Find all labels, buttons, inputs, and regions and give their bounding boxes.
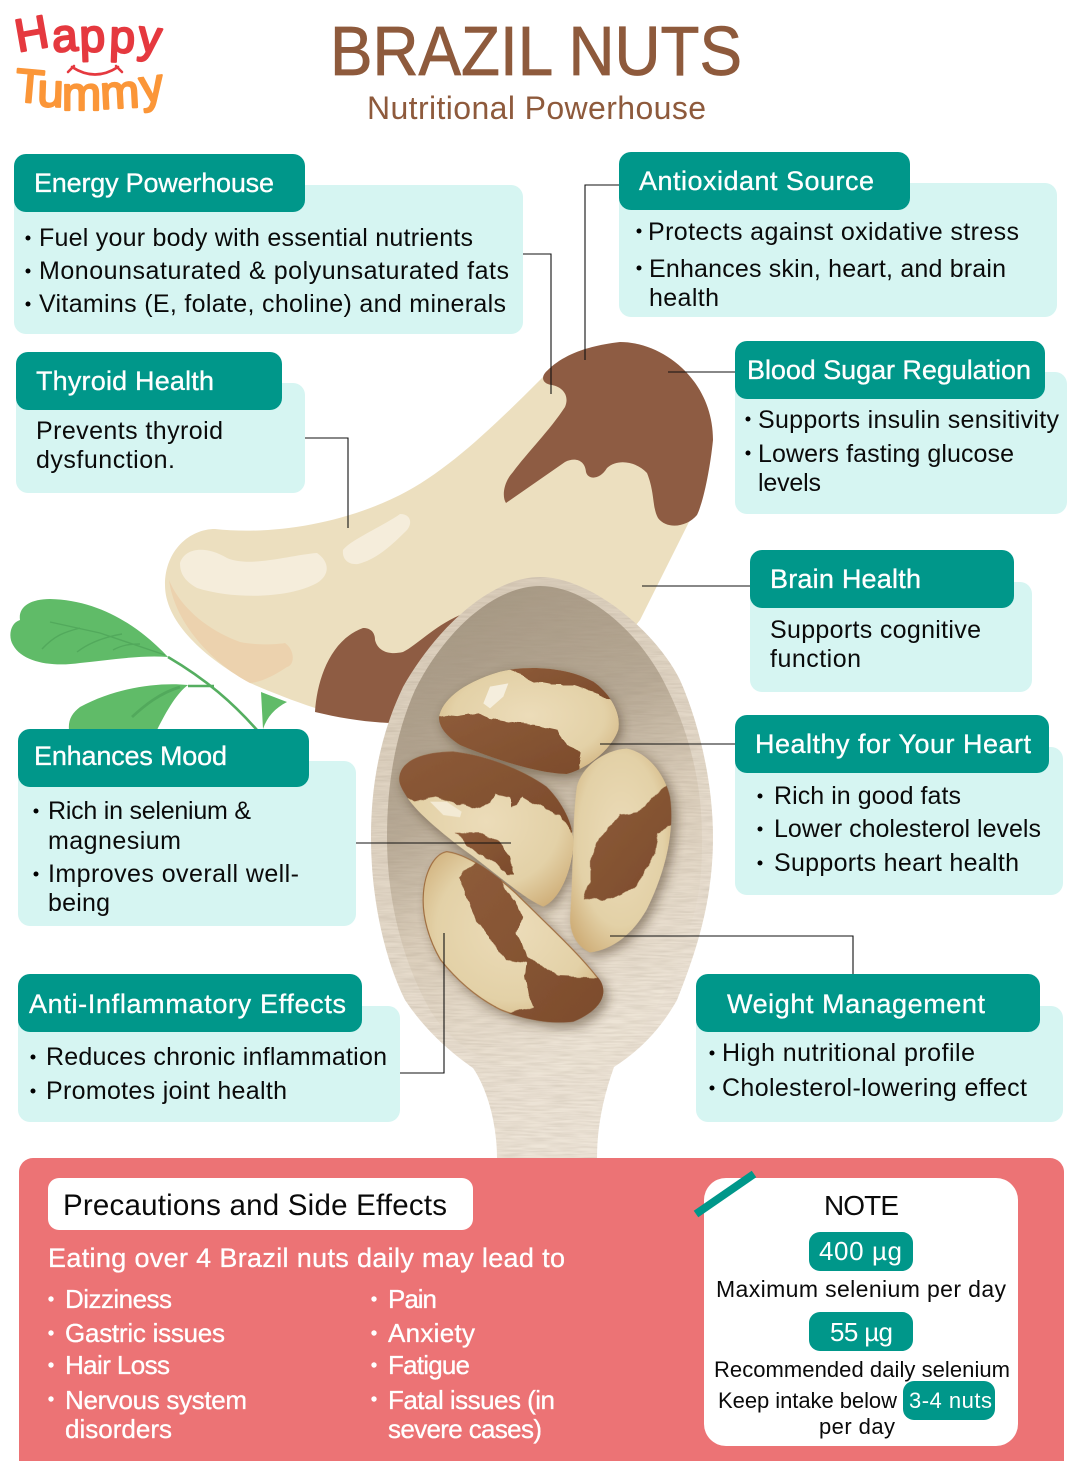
- pill: 55 µg: 55 µg: [830, 1317, 893, 1347]
- panel: Brain Health: function: [770, 645, 861, 673]
- list: side effects, second column: Anxiety: [388, 1318, 475, 1348]
- list: side effects, second column: severe cases): [388, 1414, 542, 1444]
- panel: Weight Management: [696, 974, 1063, 1122]
- pill: 400 µg: [809, 1232, 913, 1271]
- panel: Healthy for Your Heart: Healthy for Your Heart: [755, 729, 1031, 759]
- panel: Blood Sugar Regulation: Lowers fasting glucose: [758, 440, 1014, 468]
- panel: Antioxidant Source: [619, 152, 1057, 317]
- panel: Weight Management: Cholesterol-lowering effect: [722, 1074, 1027, 1102]
- panel: Enhances Mood: [18, 729, 356, 926]
- panel: Brain Health: [750, 550, 1032, 692]
- illustration: wooden spoon: [371, 577, 713, 1158]
- panel: Blood Sugar Regulation: Blood Sugar Regulation: [747, 355, 1031, 385]
- panel: Anti-Inflammatory Effects: Anti-Inflammatory Effects: [29, 989, 346, 1019]
- list: side effects, first column: Gastric issues: [65, 1318, 225, 1348]
- list: side effects, first column: Nervous system: [65, 1385, 247, 1415]
- panel: Antioxidant Source: Enhances skin, heart, and brain: [649, 255, 1006, 283]
- list: side effects, first column: [48, 1284, 247, 1444]
- panel: Healthy for Your Heart: Supports heart health: [774, 849, 1019, 877]
- panel: Enhances Mood: being: [48, 889, 110, 917]
- leader lines: [305, 185, 853, 1073]
- heading: precautions: Precautions and Side Effects: [63, 1189, 447, 1222]
- panel: Energy Powerhouse: Monounsaturated & polyunsaturated fats: [39, 257, 509, 285]
- panel: note: Recommended daily selenium: [714, 1357, 1010, 1382]
- panel: Brain Health: Supports cognitive: [770, 616, 981, 644]
- list: side effects, second column: Fatigue: [388, 1350, 470, 1380]
- panel: Blood Sugar Regulation: [735, 341, 1067, 514]
- panel: note: per day: [819, 1414, 895, 1439]
- panel: Brain Health: Brain Health: [770, 564, 921, 594]
- panel: Thyroid Health: Prevents thyroid: [36, 417, 223, 445]
- panel: Enhances Mood: Enhances Mood: [34, 741, 227, 771]
- list: side effects, first column: disorders: [65, 1414, 172, 1444]
- nut: bottom: [423, 851, 613, 1028]
- panel: note: Maximum selenium per day: [716, 1276, 1006, 1302]
- illustration: green leaves: [10, 599, 287, 730]
- list: side effects, first column: Hair Loss: [65, 1350, 170, 1380]
- panel: Enhances Mood: Improves overall well-: [48, 860, 299, 888]
- list: side effects, second column: Pain: [388, 1284, 437, 1314]
- title: BRAZIL NUTS: [330, 12, 742, 90]
- panel: Enhances Mood: magnesium: [48, 827, 181, 855]
- illustration: large cartoon brazil nut: [165, 342, 713, 723]
- panel: Healthy for Your Heart: [735, 715, 1063, 895]
- panel: Weight Management: High nutritional profile: [722, 1039, 975, 1067]
- panel: Energy Powerhouse: [14, 154, 523, 334]
- panel: Antioxidant Source: Antioxidant Source: [639, 166, 874, 196]
- panel: Blood Sugar Regulation: levels: [758, 469, 821, 497]
- heading: precautions: [48, 1178, 473, 1230]
- illustration: four brazil nuts: [390, 660, 677, 1028]
- panel: Healthy for Your Heart: Rich in good fats: [774, 782, 961, 810]
- panel: Anti-Inflammatory Effects: Promotes joint health: [46, 1077, 287, 1105]
- pill: 55 µg: [809, 1312, 913, 1351]
- pill: 3-4 nuts: [903, 1381, 995, 1420]
- subtitle: Nutritional Powerhouse: [367, 90, 706, 126]
- icon: tape strip: [696, 1174, 754, 1214]
- pill: 400 µg: 400 µg: [819, 1236, 902, 1266]
- nut: left: [390, 743, 573, 907]
- logo: Happy Tummy: [11, 5, 167, 120]
- text: intro sentence: Eating over 4 Brazil nuts daily may lead to: [48, 1243, 565, 1273]
- nut shadows: [402, 672, 676, 1028]
- list: side effects, first column: Dizziness: [65, 1284, 172, 1314]
- panel: Healthy for Your Heart: Lower cholesterol levels: [774, 815, 1041, 843]
- panel: Weight Management: Weight Management: [727, 989, 985, 1019]
- panel: note: NOTE: [824, 1190, 899, 1221]
- panel: Energy Powerhouse: Energy Powerhouse: [34, 168, 274, 198]
- panel: Thyroid Health: dysfunction.: [36, 446, 175, 474]
- panel: Thyroid Health: Thyroid Health: [36, 366, 214, 396]
- panel: Precautions and Side Effects: [19, 1158, 1064, 1461]
- logo: Happy Tummy: Tummy: [13, 57, 167, 120]
- panel: Blood Sugar Regulation: Supports insulin sensitivity: [758, 406, 1060, 434]
- pill: 3-4 nuts: 3-4 nuts: [909, 1388, 992, 1413]
- nut: right: [570, 748, 677, 953]
- panel: note: Keep intake below: [718, 1388, 897, 1413]
- panel: note: [696, 1174, 1018, 1446]
- panel: Energy Powerhouse: Fuel your body with essential nutrients: [39, 224, 473, 252]
- nut: top: [439, 668, 619, 774]
- panel: Anti-Inflammatory Effects: [18, 974, 400, 1122]
- panel: Anti-Inflammatory Effects: Reduces chronic inflammation: [46, 1043, 387, 1071]
- panel: Thyroid Health: [16, 352, 305, 493]
- panel: Energy Powerhouse: Vitamins (E, folate, choline) and minerals: [39, 290, 506, 318]
- panel: Enhances Mood: Rich in selenium &: [48, 797, 251, 825]
- panel: Antioxidant Source: Protects against oxidative stress: [648, 218, 1019, 246]
- logo: Happy Tummy: Happy: [11, 5, 164, 63]
- panel: Antioxidant Source: health: [649, 284, 719, 312]
- list: side effects, second column: Fatal issues (in: [388, 1385, 555, 1415]
- list: side effects, second column: [371, 1284, 555, 1444]
